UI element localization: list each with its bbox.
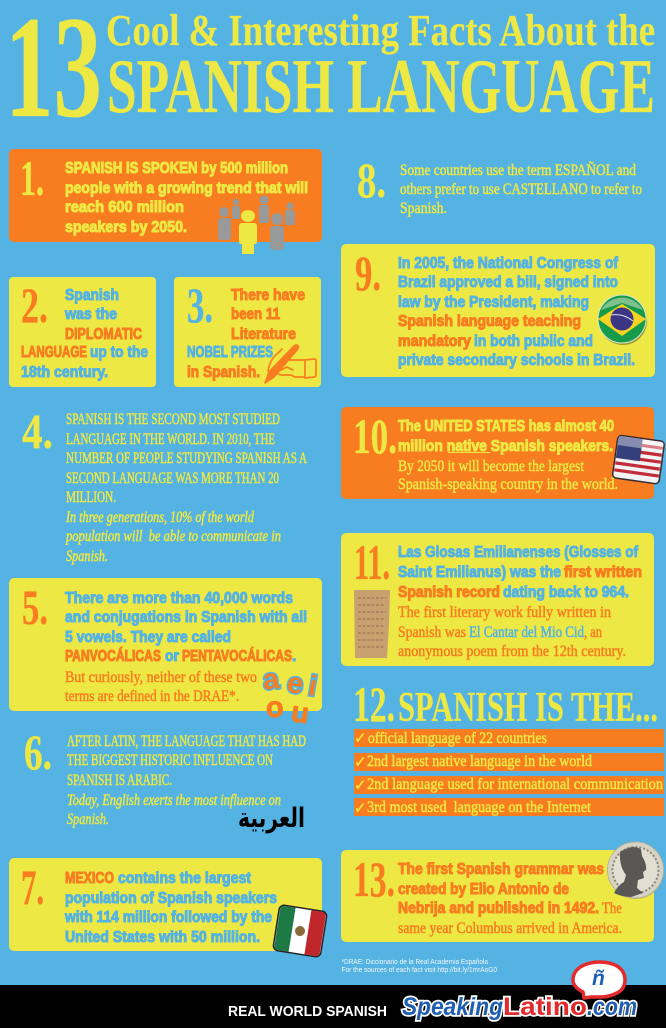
icon: USA flag — [612, 435, 665, 484]
text: fact 10: The UNITED STATES has almost 40 — [398, 418, 614, 435]
text: fact 7: contains the largest — [118, 870, 251, 887]
footnote: For the sources of each fact visit http://bit.ly/1mrAoG0 — [342, 967, 497, 974]
logo: SpeakingLatino.com: Speaking — [402, 993, 503, 1021]
text: fact 4: In three generations, 10% of the world — [65, 509, 255, 526]
text: fact 3: Literature — [231, 326, 296, 343]
text: fact 9 — [398, 255, 635, 369]
text: fact 11: Spanish record — [398, 584, 500, 601]
text: fact 11: first written — [564, 564, 642, 581]
title — [5, 0, 655, 148]
panel: fact 12 — [353, 676, 664, 817]
panel: fact 8 — [357, 152, 642, 217]
text: fact 11: anonymous poem from the 12th century. — [398, 643, 626, 660]
text: fact 7: with 114 million followed by the — [64, 909, 272, 926]
text: fact 9: Brazil approved a bill, signed into — [398, 274, 618, 291]
number 9: 9. — [355, 245, 381, 301]
number 6: 6. — [24, 724, 52, 780]
text: fact 4: SPANISH IS THE SECOND MOST STUDIED — [66, 411, 280, 428]
text: fact 4: population will be able to communicate in — [65, 528, 281, 545]
text: fact 13: created by Elio Antonio de — [398, 881, 569, 898]
panel: fact 5 — [9, 578, 322, 730]
panel: fact 7 — [9, 858, 327, 957]
icon: vowels: a — [261, 663, 282, 697]
panel: fact 2 — [9, 277, 156, 387]
text: fact 5: PANVOCÁLICAS — [65, 648, 161, 665]
text: fact 4: LANGUAGE IN THE WORLD. IN 2010, THE — [66, 431, 275, 448]
list item 3: ✓ — [354, 776, 367, 794]
text: fact 11: dating back to 964. — [503, 584, 629, 601]
text: fact 7: United States with 50 million. — [65, 929, 260, 946]
number 13: 13. — [353, 851, 395, 907]
number 7: 7. — [21, 859, 44, 915]
number 5: 5. — [22, 579, 48, 635]
text: fact 5: or — [165, 648, 179, 665]
text: fact 5: 5 vowels. They are called — [65, 629, 231, 646]
footnote — [342, 959, 497, 974]
text: fact 9: in both public and — [474, 333, 593, 350]
text: fact 2: DIPLOMATIC — [65, 326, 142, 343]
text: fact 10: Spanish-speaking country in the world. — [398, 476, 618, 493]
number 10: 10. — [353, 408, 397, 464]
text: fact 11: Spanish was — [398, 624, 466, 641]
text: fact 3: been 11 — [231, 306, 280, 323]
text: fact 5 — [65, 590, 307, 705]
text: fact 2: up to the — [90, 344, 148, 361]
text: fact 13: The first Spanish grammar was — [398, 861, 604, 878]
text: fact 2: LANGUAGE — [21, 344, 87, 361]
list item 4: 3rd most used language on the Internet — [367, 799, 591, 816]
icon: Nebrija coin — [608, 842, 664, 899]
text: fact 10: By 2050 it will become the largest — [398, 458, 584, 475]
text: fact 5: terms are defined in the DRAE*. — [65, 688, 239, 705]
text: fact 6: Spanish. — [67, 811, 109, 828]
panel: fact 6 — [24, 724, 306, 834]
text: fact 11: The first literary work fully written in — [398, 604, 611, 621]
text: fact 11 — [398, 544, 642, 660]
text: fact 4: NUMBER OF PEOPLE STUDYING SPANISH AS A — [66, 450, 307, 467]
image: manuscript — [354, 590, 390, 658]
text: fact 10 — [398, 418, 618, 493]
panel: fact 9 — [341, 244, 655, 377]
text: fact 1: reach 600 million — [65, 199, 184, 216]
icon: vowels — [261, 663, 319, 730]
text: fact 5: There are more than 40,000 words — [65, 590, 293, 607]
text: fact 6: SPANISH IS ARABIC. — [67, 772, 172, 789]
text: fact 4: Spanish. — [66, 548, 108, 565]
number 8: 8. — [357, 152, 386, 208]
text: fact 5: PENTAVOCÁLICAS — [182, 648, 292, 665]
icon: vowels: u — [289, 696, 311, 730]
text: fact 13 — [398, 861, 622, 937]
text: fact 9: Spanish language teaching — [398, 313, 581, 330]
footnote: *DRAE: Diccionario de la Real Academia Española — [342, 959, 488, 966]
text: fact 13: same year Columbus arrived in America. — [398, 920, 622, 937]
text: fact 7: population of Spanish speakers — [65, 890, 277, 907]
number 4: 4. — [22, 403, 53, 459]
text: fact 6 — [67, 733, 306, 828]
text: fact 1: people with a growing trend that will — [65, 180, 308, 197]
list item 1: ✓ — [354, 729, 367, 747]
text: fact 5: . — [292, 648, 296, 665]
logo: SpeakingLatino.com: .com — [587, 993, 637, 1021]
text: fact 11: El Cantar del Mio Cid — [469, 624, 584, 641]
text: fact 13: Nebrija and published in 1492. — [398, 900, 599, 917]
panel: fact 11 — [341, 533, 654, 666]
panel: fact 3 — [174, 277, 321, 387]
text: fact 11: , an — [584, 624, 602, 641]
text: fact 10: million native Spanish speakers. — [398, 438, 613, 455]
number 2: 2. — [21, 277, 48, 333]
text: fact 2: was the — [64, 306, 117, 323]
number 1: 1. — [20, 150, 44, 206]
text: fact 1: SPANISH IS SPOKEN by 500 million — [65, 160, 288, 177]
icon: vowels: i — [306, 670, 319, 703]
icon: vowels: o — [265, 691, 285, 725]
footer bar — [0, 962, 666, 1028]
icon: vowels: e — [285, 667, 305, 701]
logo: SpeakingLatino.com: Latino — [503, 993, 587, 1021]
icon: group of people — [218, 196, 295, 254]
text: fact 7 — [64, 870, 277, 946]
text: fact 11: Las Glosas Emilianenses (Glosses of — [398, 544, 639, 561]
icon: Brazil flag — [598, 295, 647, 345]
logo: SpeakingLatino.com — [402, 962, 637, 1021]
list item 1 — [354, 729, 664, 747]
icon: hand writing — [265, 345, 316, 383]
text: fact 1 — [65, 160, 308, 236]
list item 1: official language of 22 countries — [368, 730, 547, 747]
text: Arabic word: العربية — [238, 803, 305, 834]
text: fact 9: private secondary schools in Brazil. — [398, 352, 635, 369]
text: fact 2: Spanish — [65, 287, 119, 304]
number 3: 3. — [187, 277, 213, 333]
text: fact 6: Today, English exerts the most influence on — [67, 792, 281, 809]
panel: fact 4 — [22, 403, 307, 565]
icon: Mexico flag — [273, 905, 327, 957]
text: fact 6: THE BIGGEST HISTORIC INFLUENCE ON — [67, 752, 273, 769]
text: fact 5: and conjugations in Spanish with all — [65, 609, 307, 626]
text: fact 11: Saint Emilianus) was the — [398, 564, 561, 581]
text: fact 2: 18th century. — [21, 364, 108, 381]
number 11: 11. — [354, 534, 390, 590]
text: fact 3: NOBEL PRIZES — [187, 344, 273, 361]
text: fact 8 — [400, 161, 642, 217]
text: fact 13: The — [602, 900, 622, 917]
text: fact 2 — [21, 287, 148, 381]
text: fact 8: Spanish. — [400, 200, 447, 217]
text: fact 1: speakers by 2050. — [65, 219, 187, 236]
text: fact 4: SECOND LANGUAGE WAS MORE THAN 20 — [66, 470, 279, 487]
text: fact 4 — [65, 411, 307, 565]
text: fact 5: But curiously, neither of these two — [65, 669, 257, 686]
number 12: 12. — [353, 676, 395, 732]
logo: SpeakingLatino.com: ñ — [592, 967, 605, 990]
list item 4: ✓ — [354, 799, 367, 817]
panel: fact 1 — [9, 149, 322, 254]
panel: fact 13 — [341, 842, 664, 942]
text: fact 3 — [187, 287, 305, 381]
text: fact 3: in Spanish. — [187, 364, 260, 381]
list item 2: ✓ — [354, 753, 367, 771]
tagline: REAL WORLD SPANISH — [228, 1004, 387, 1020]
text: fact 9: mandatory — [398, 333, 471, 350]
text: fact 9: law by the President, making — [398, 294, 589, 311]
text: fact 6: AFTER LATIN, THE LANGUAGE THAT HAS HAD — [67, 733, 306, 750]
list item 2: 2nd largest native language in the world — [367, 753, 592, 770]
text: fact 7: MEXICO — [65, 870, 114, 887]
text: fact 4: MILLION. — [66, 489, 116, 506]
text: fact 9: In 2005, the National Congress of — [398, 255, 619, 272]
text: fact 3: There have — [231, 287, 305, 304]
panel: fact 10 — [341, 407, 665, 499]
